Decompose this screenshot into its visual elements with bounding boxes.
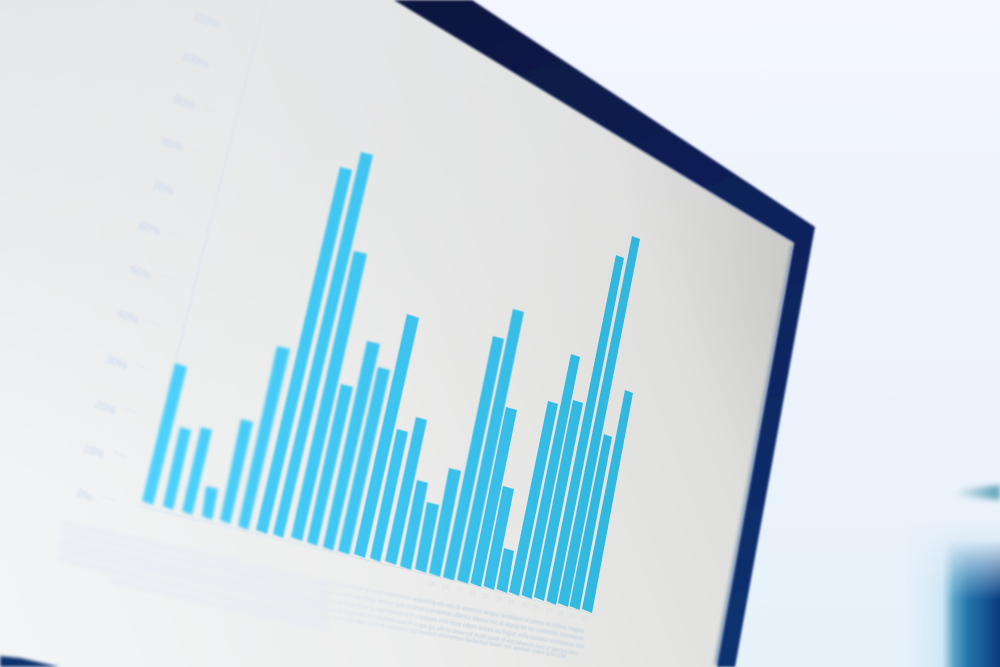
- y axis labels: 110%: [192, 11, 222, 31]
- y axis labels: 80%: [160, 136, 185, 154]
- monitor screen: [0, 0, 793, 667]
- caption text: in-focus right portion: Lorem ipsum dolor sit amet consectetur adipiscing elit sed do eiusmod tempor incididunt ut labore et dolore magna: [320, 578, 585, 635]
- monitor bezel: [394, 0, 815, 667]
- y axis tick marks: [103, 26, 239, 501]
- bars 13 to 20: light blur: [354, 309, 524, 584]
- caption text: in-focus right portion: aliqua ut enim ad minim veniam quis nostrud exercitation ullamco laboris nisi ut aliquip ex ea commodo consequat: [320, 587, 585, 642]
- x axis labels: 19: [442, 585, 449, 591]
- x axis labels: 26: [533, 605, 540, 611]
- x axis labels: 18: [428, 581, 435, 587]
- y axis line: [176, 0, 266, 360]
- x axis labels: 29: [569, 614, 576, 620]
- bars 7 to 12: moderate blur: [256, 152, 390, 555]
- y axis labels: 10%: [81, 443, 106, 461]
- x axis labels: 23: [495, 597, 502, 603]
- bar chart: [142, 152, 640, 613]
- y axis labels: [75, 11, 222, 504]
- y axis labels: 0%: [75, 488, 94, 504]
- x axis labels: 30: [581, 617, 588, 623]
- y axis labels: 50%: [128, 264, 153, 282]
- x axis labels: 27: [546, 609, 553, 615]
- y axis labels: 90%: [172, 94, 197, 112]
- caption text: in-focus right portion: occaecat cupidatat non proident sunt in culpa qui officia deserunt mollit anim id est laborum sed ut perspiciatis: [320, 604, 579, 657]
- x axis labels: [428, 581, 588, 623]
- bars 1 to 6: strongest focus blur: [142, 346, 290, 530]
- x axis labels: 20: [456, 588, 463, 594]
- y axis labels: 30%: [104, 354, 129, 372]
- caption text: in-focus right portion: duis aute irure dolor in reprehenderit in voluptate velit esse cillum dolore eu fugiat nulla pariatur excepteur sint: [320, 596, 585, 650]
- x axis labels: 25: [521, 603, 528, 609]
- y axis labels: 20%: [93, 399, 118, 417]
- x axis labels: 28: [557, 611, 564, 617]
- caption text: in-focus right portion: [320, 578, 585, 660]
- x axis labels: 21: [469, 591, 476, 597]
- y axis labels: 60%: [137, 220, 162, 238]
- x axis labels: 22: [482, 594, 489, 600]
- x axis labels: 24: [508, 600, 515, 606]
- y axis labels: 70%: [151, 180, 176, 198]
- y axis labels: 100%: [180, 51, 211, 72]
- bars 21 to 30: nearly sharp: [470, 236, 640, 613]
- blurred blue object at lower right: [918, 482, 1000, 667]
- bottom-left bezel corner: [0, 656, 60, 667]
- caption text: out-of-focus left portion: [58, 523, 330, 629]
- x axis line: [140, 506, 597, 615]
- y axis labels: 40%: [115, 308, 140, 326]
